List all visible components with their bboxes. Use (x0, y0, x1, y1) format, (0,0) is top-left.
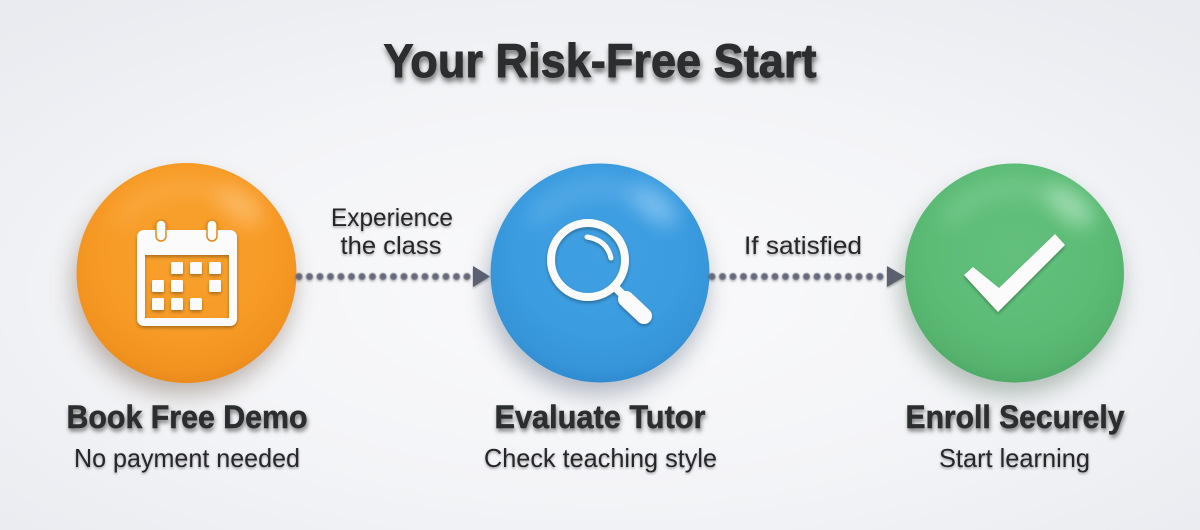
arrow: step 2 to step 3 (712, 266, 905, 287)
blue circle button (490, 164, 710, 382)
heading: enroll securely: Enroll Securely (906, 399, 1125, 435)
panel: step 2 evaluate tutor (484, 164, 717, 473)
icon: magnifying glass (551, 223, 644, 316)
arrow label: experience the class: the class (340, 232, 442, 260)
orange circle button (76, 163, 296, 383)
circle shadow: green (901, 179, 1121, 395)
heading: book free demo: Book Free Demo (66, 399, 308, 435)
subtext: no payment needed: No payment needed (74, 443, 300, 473)
panel: step 3 enroll securely (901, 164, 1125, 473)
subtext: start learning: Start learning (939, 443, 1090, 473)
arrow label: experience the class: Experience (331, 204, 453, 232)
green circle button (905, 164, 1124, 382)
title: Your Risk-Free Start (384, 34, 817, 87)
heading: evaluate tutor: Evaluate Tutor (494, 399, 706, 435)
arrow: step 1 to step 2 (299, 266, 490, 287)
arrow label: experience the class (331, 204, 453, 260)
panel: step 1 book free demo (66, 163, 308, 473)
icon: check mark (964, 234, 1065, 312)
circle shadow: orange (73, 179, 293, 395)
circle shadow: blue (487, 179, 707, 395)
icon: calendar (137, 220, 237, 326)
subtext: check teaching style: Check teaching style (484, 443, 717, 473)
arrow label: if satisfied: If satisfied (744, 232, 862, 260)
